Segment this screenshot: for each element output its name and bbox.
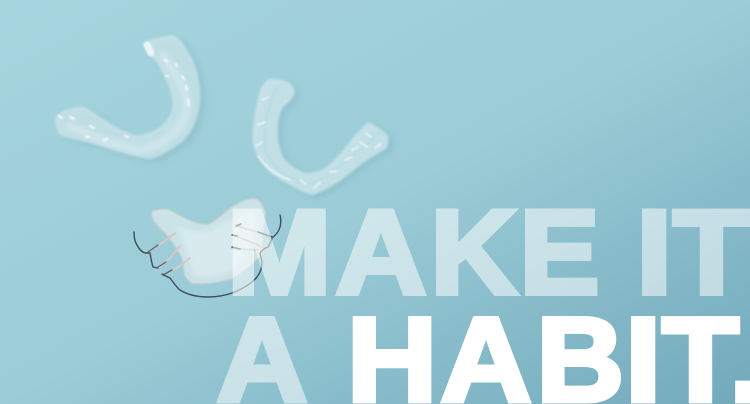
photo: retainer with wire xyxy=(134,199,281,297)
wire clasps xyxy=(134,215,281,297)
heading: make it a: E xyxy=(520,186,600,320)
heading: habit xyxy=(347,292,750,404)
right tray highlights xyxy=(256,97,381,188)
heading: make it a: I xyxy=(636,185,672,319)
heading: make it a xyxy=(216,185,750,404)
heading: make it a: M xyxy=(227,186,331,320)
photo: right aligner tray xyxy=(253,79,393,198)
left tray highlights xyxy=(59,45,189,140)
heading: make it a: K xyxy=(430,186,517,320)
heading: make it a: A xyxy=(336,186,426,320)
photo: left aligner tray xyxy=(55,35,205,162)
heading: make it a: T xyxy=(673,186,750,320)
